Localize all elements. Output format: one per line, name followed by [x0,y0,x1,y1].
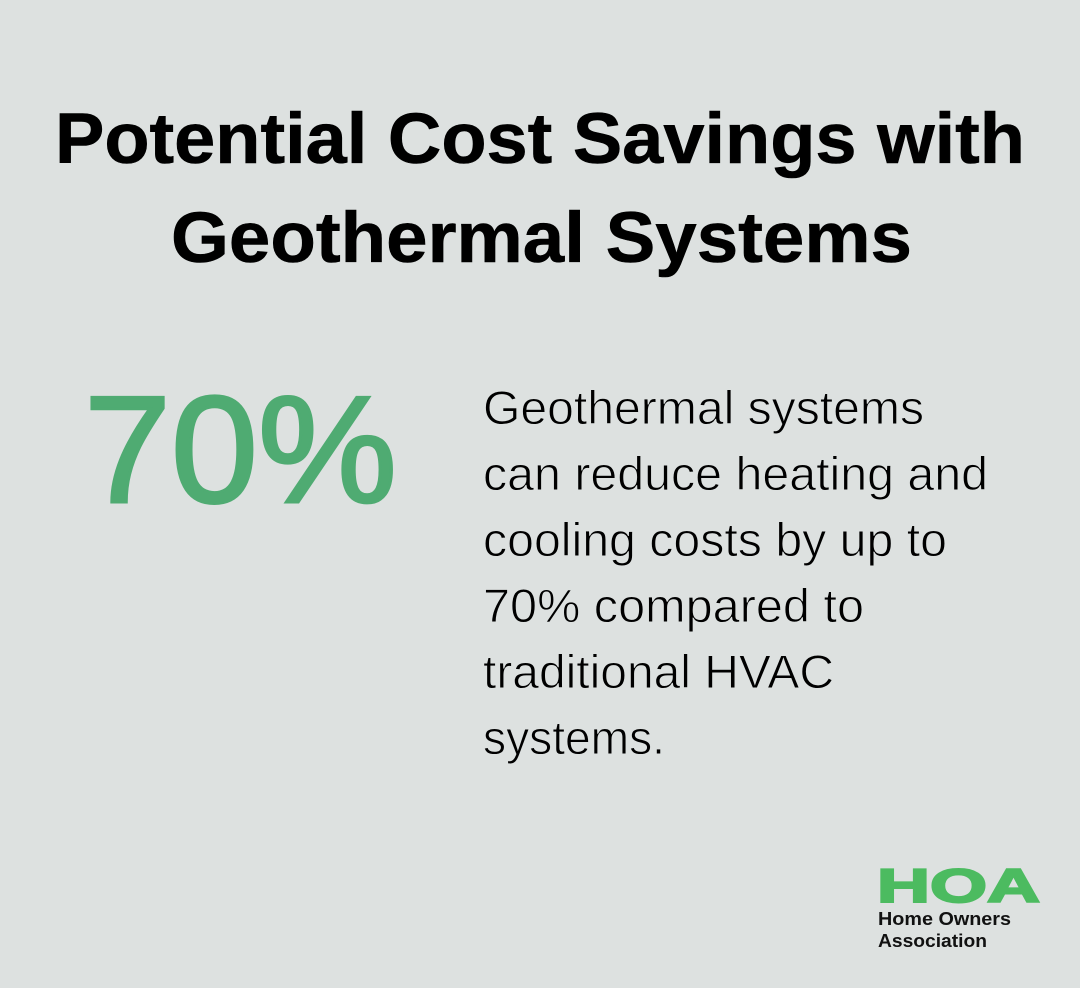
title [55,100,1025,278]
logo mark: HOA: HOA [877,859,1040,912]
description text [483,381,988,764]
description text: cooling costs by up to [483,513,947,566]
statistic: 70%: 70% [84,365,397,535]
description text: Geothermal systems [483,381,924,434]
logo: HOA Home Owners Association [877,859,1040,951]
logo wordmark: Home Owners [878,909,1011,929]
description text: can reduce heating and [483,447,988,500]
logo wordmark: Association [878,931,987,951]
logo wordmark [878,909,1011,951]
description text: traditional HVAC [483,645,834,698]
description text: 70% compared to [483,579,864,632]
description text: systems. [483,711,665,764]
title: Potential Cost Savings with [55,100,1025,179]
title: Geothermal Systems [171,199,912,278]
